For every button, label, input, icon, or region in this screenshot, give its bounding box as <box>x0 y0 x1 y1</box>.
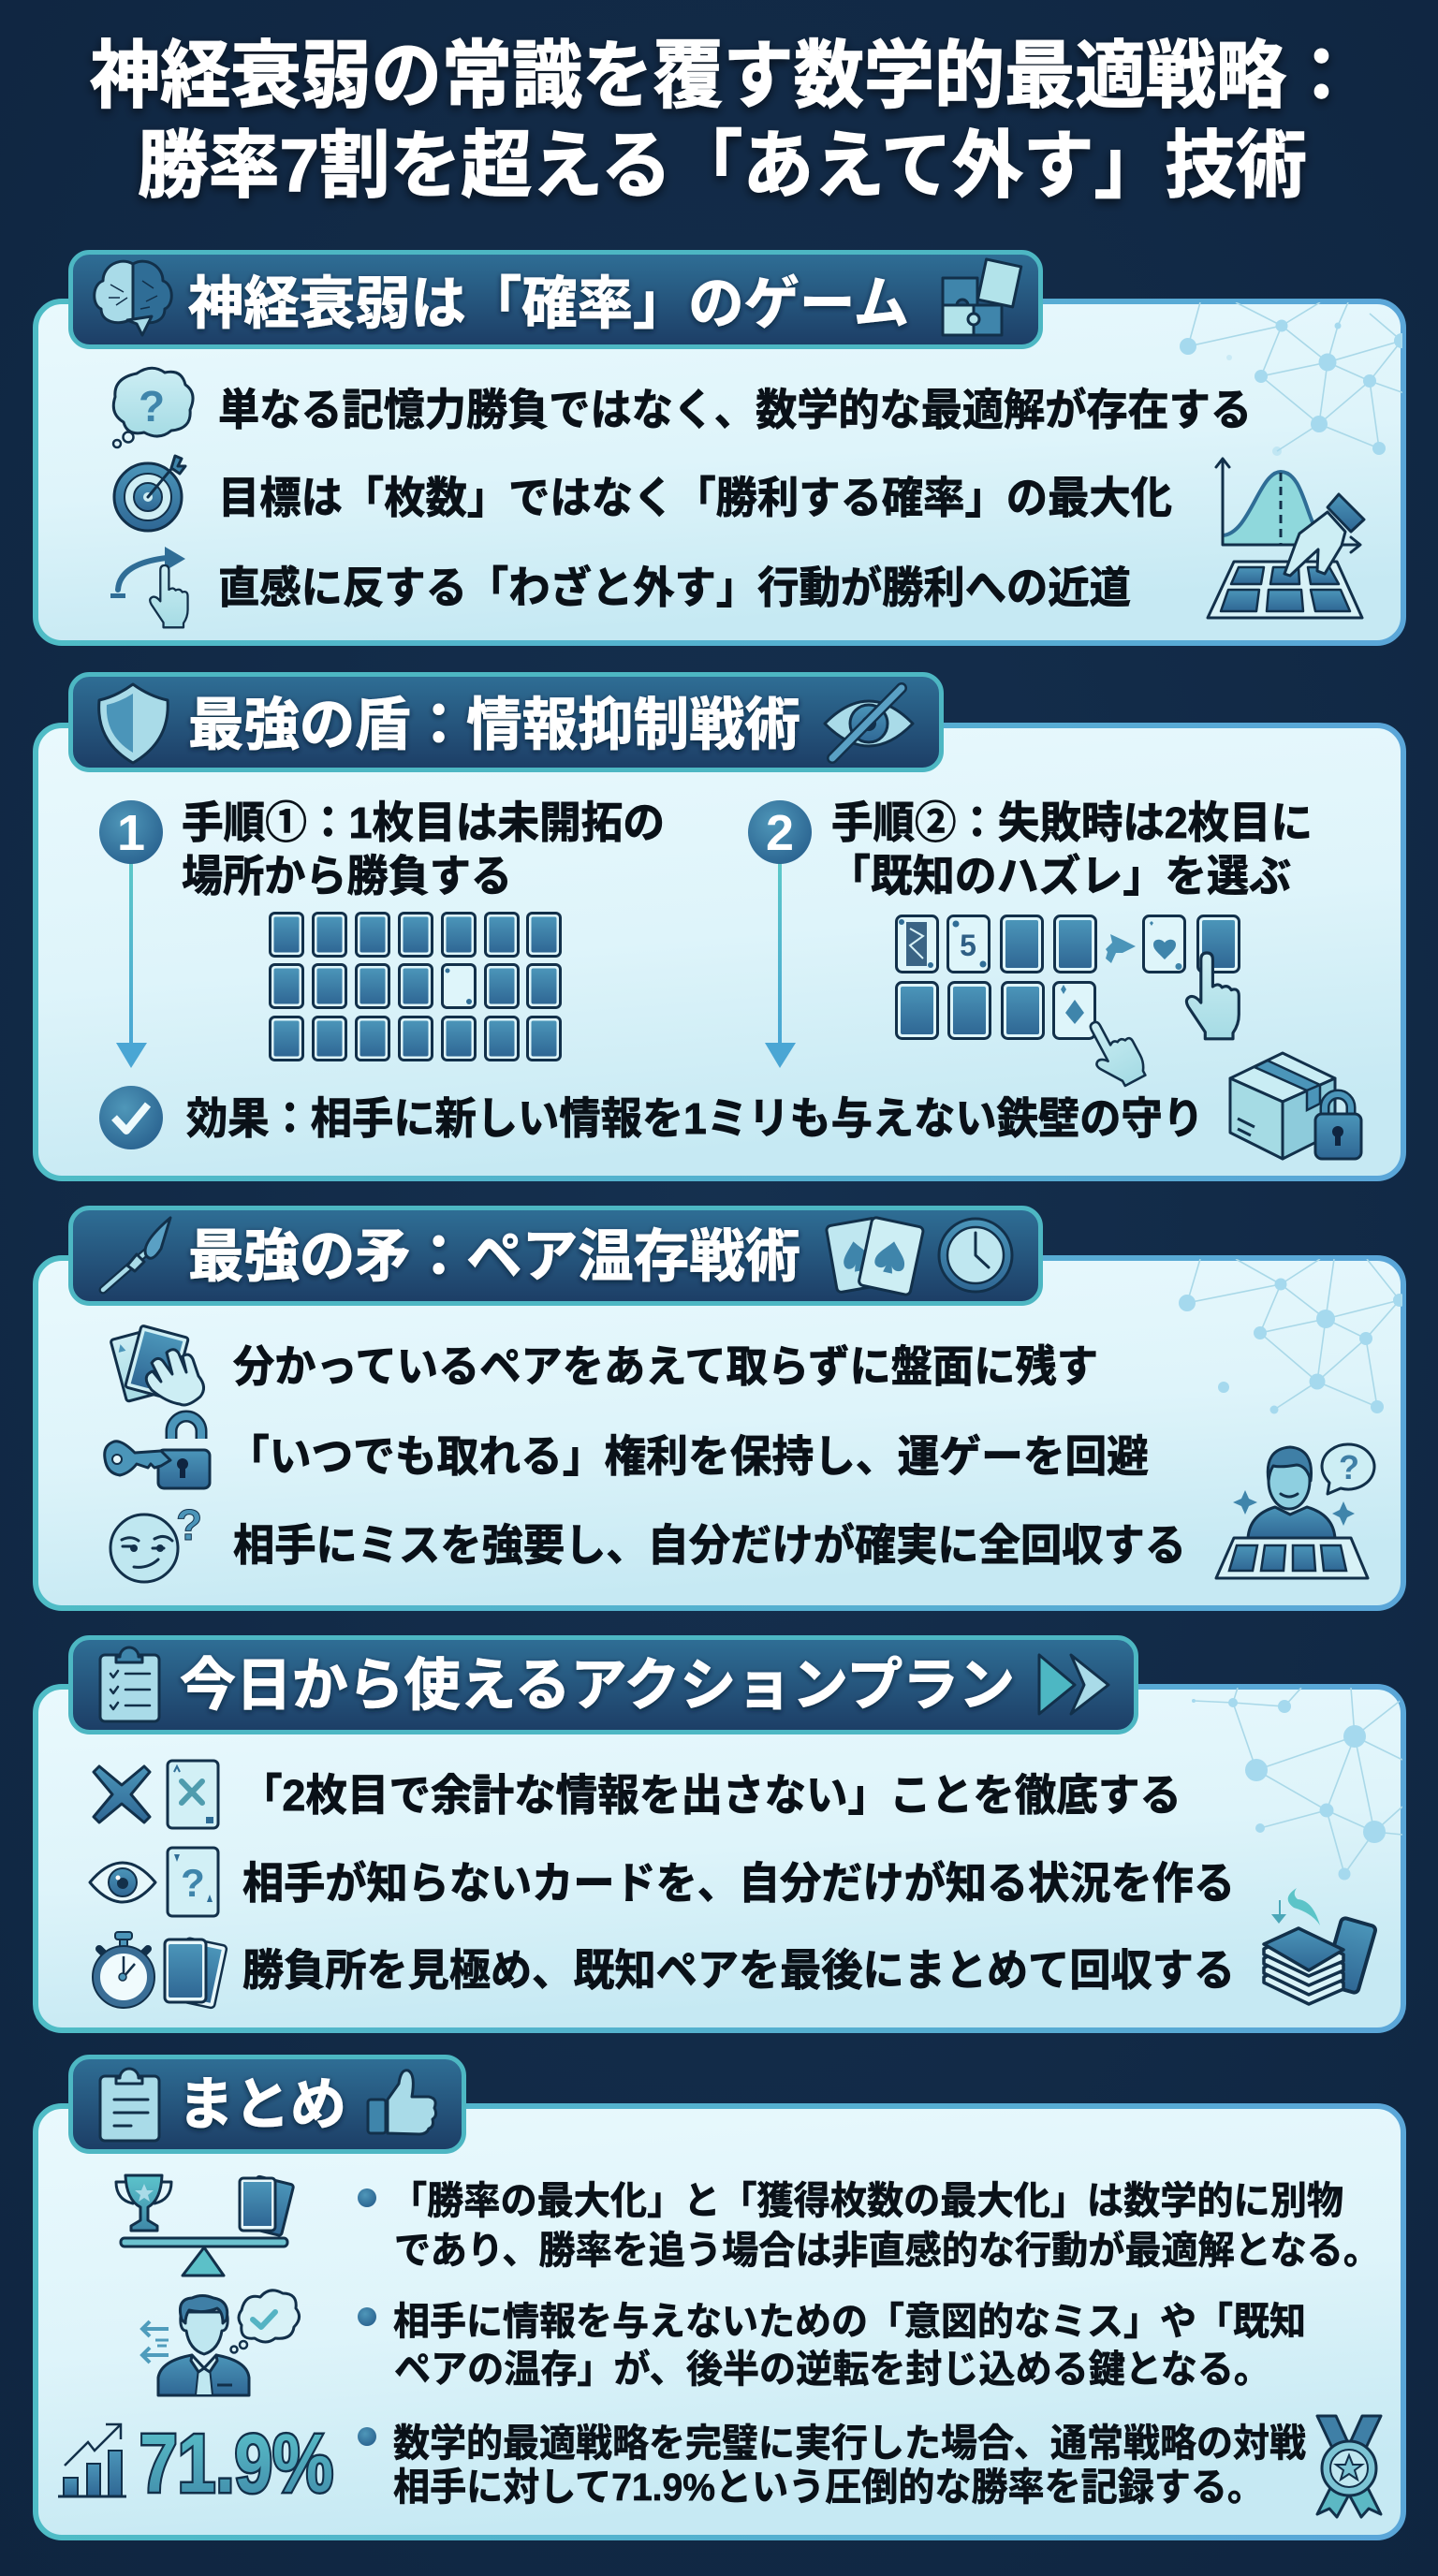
bullet 3 <box>358 2422 1306 2509</box>
bullet 3: 数学的最適戦略を完璧に実行した場合、通常戦略の対戦 <box>393 2422 1306 2465</box>
bullet 1: であり、勝率を追う場合は非直感的な行動が最適解となる。 <box>394 2229 1380 2272</box>
icon: thought cloud question: ? <box>139 382 165 431</box>
header: ペア温存戦術 <box>71 1208 1041 1303</box>
network decoration <box>1179 1259 1406 1413</box>
icon: thinking player at board: ? <box>1339 1448 1359 1486</box>
card illustration with hands: 5 <box>960 929 976 962</box>
icon: trophy on scale vs cards <box>116 2175 294 2276</box>
panel: 確率のゲーム <box>36 301 1409 643</box>
icon: brain <box>95 261 171 335</box>
icon: spear <box>103 1218 170 1290</box>
icon: smirking face <box>110 1500 202 1582</box>
step 2 text: 手順②：失敗時は2枚目に <box>831 798 1313 847</box>
title: 神経衰弱の常識を覆す数学的最適戦略： <box>90 34 1357 117</box>
row text 2: 相手が知らないカードを、自分だけが知る状況を作る <box>242 1859 1235 1908</box>
icon: thought cloud question <box>113 368 193 447</box>
icon: thinking person <box>142 2291 300 2395</box>
panel: ペア温存戦術 <box>36 1258 1406 1608</box>
step 2 marker <box>748 800 812 1068</box>
header: 情報抑制戦術 <box>71 674 942 769</box>
icon: collected card stack <box>1264 1888 1376 2004</box>
step 1 text <box>182 798 665 900</box>
icon: crossed eye <box>825 688 913 758</box>
card grid 7x3 <box>270 914 560 1060</box>
panel: まとめ <box>36 2106 1403 2538</box>
step 1 text: 手順①：1枚目は未開拓の <box>182 798 665 847</box>
bullet 2 <box>358 2300 1306 2391</box>
icon: eye and card: ? <box>181 1861 205 1905</box>
icon: double chevron <box>1039 1655 1108 1714</box>
header: まとめ <box>71 2057 464 2151</box>
step 1 marker <box>99 800 163 1068</box>
icon: clock <box>939 1219 1012 1292</box>
bullet 2: 相手に情報を与えないための「意図的なミス」や「既知 <box>393 2300 1306 2343</box>
title <box>90 34 1357 207</box>
icon: hand with curved arrow <box>110 547 188 627</box>
bullet 2: ペアの温存」が、後半の逆転を封じ込める鍵となる。 <box>394 2348 1270 2391</box>
icon: spade cards <box>826 1217 924 1295</box>
bullet 1: 「勝率の最大化」と「獲得枚数の最大化」は数学的に別物 <box>390 2179 1343 2222</box>
step 2 text <box>829 798 1313 900</box>
row text 1: 「2枚目で余計な情報を出さない」ことを徹底する <box>241 1771 1181 1820</box>
big number: 71.9% <box>139 2417 333 2510</box>
icon: target <box>114 456 185 531</box>
icon: key and lock <box>105 1416 210 1488</box>
heading: 神経衰弱は「確率」のゲーム <box>188 271 909 335</box>
row text 2: 「いつでも取れる」権利を保持し、運ゲーを回避 <box>227 1432 1149 1481</box>
row text 3: 直感に反する「わざと外す」行動が勝利への近道 <box>218 564 1131 612</box>
icon: thinking player at board <box>1216 1444 1374 1578</box>
icon: smirking face: ? <box>176 1500 202 1549</box>
icon: stopwatch and cards <box>93 1932 227 2009</box>
step 2 text: 「既知のハズレ」を選ぶ <box>829 852 1291 900</box>
panel: 情報抑制戦術 <box>36 725 1403 1178</box>
icon: eye and card <box>90 1848 218 1916</box>
heading: まとめ <box>178 2072 346 2136</box>
title: 勝率7割を超える「あえて外す」技術 <box>138 124 1307 207</box>
icon: cross and card <box>94 1761 218 1828</box>
icon: bell curve and hand on card board <box>1208 459 1364 618</box>
icon: cards under hand <box>110 1325 204 1405</box>
step 1 text: 場所から勝負する <box>182 852 512 900</box>
heading: 今日から使えるアクションプラン <box>180 1653 1015 1717</box>
row text 3: 勝負所を見極め、既知ペアを最後にまとめて回収する <box>242 1946 1235 1995</box>
header: 確率のゲーム <box>71 253 1041 346</box>
row text 3: 相手にミスを強要し、自分だけが確実に全回収する <box>233 1521 1186 1570</box>
stat: 71.9% with chart <box>58 2417 333 2510</box>
bullet 3: 相手に対して71.9%という圧倒的な勝率を記録する。 <box>393 2466 1264 2509</box>
network decoration <box>1192 1688 1402 1880</box>
step 1 marker: 1 <box>117 805 145 861</box>
icon: checklist <box>100 1647 159 1721</box>
row text 1: 単なる記憶力勝負ではなく、数学的な最適解が存在する <box>218 386 1252 434</box>
panel: アクションプラン <box>36 1687 1403 2030</box>
network decoration <box>1180 302 1409 456</box>
icon: thumbs up <box>368 2071 436 2134</box>
row text 2: 目標は「枚数」ではなく「勝利する確率」の最大化 <box>218 474 1172 522</box>
effect text: 効果：相手に新しい情報を1ミリも与えない鉄壁の守り <box>186 1094 1204 1143</box>
heading: 最強の矛：ペア温存戦術 <box>188 1224 800 1288</box>
effect check <box>99 1086 163 1149</box>
icon: clipboard <box>100 2069 159 2141</box>
icon: shield <box>99 684 168 763</box>
heading: 最強の盾：情報抑制戦術 <box>188 693 800 756</box>
bullet 1 <box>358 2179 1380 2272</box>
icon: medal <box>1317 2416 1381 2517</box>
card illustration with hands <box>897 915 1240 1093</box>
step 2 marker: 2 <box>766 805 794 861</box>
icon: rising chart <box>58 2424 126 2496</box>
header: アクションプラン <box>71 1638 1137 1732</box>
row text 1: 分かっているペアをあえて取らずに盤面に残す <box>233 1342 1098 1391</box>
icon: box with lock <box>1230 1053 1361 1159</box>
icon: puzzle <box>943 259 1021 335</box>
